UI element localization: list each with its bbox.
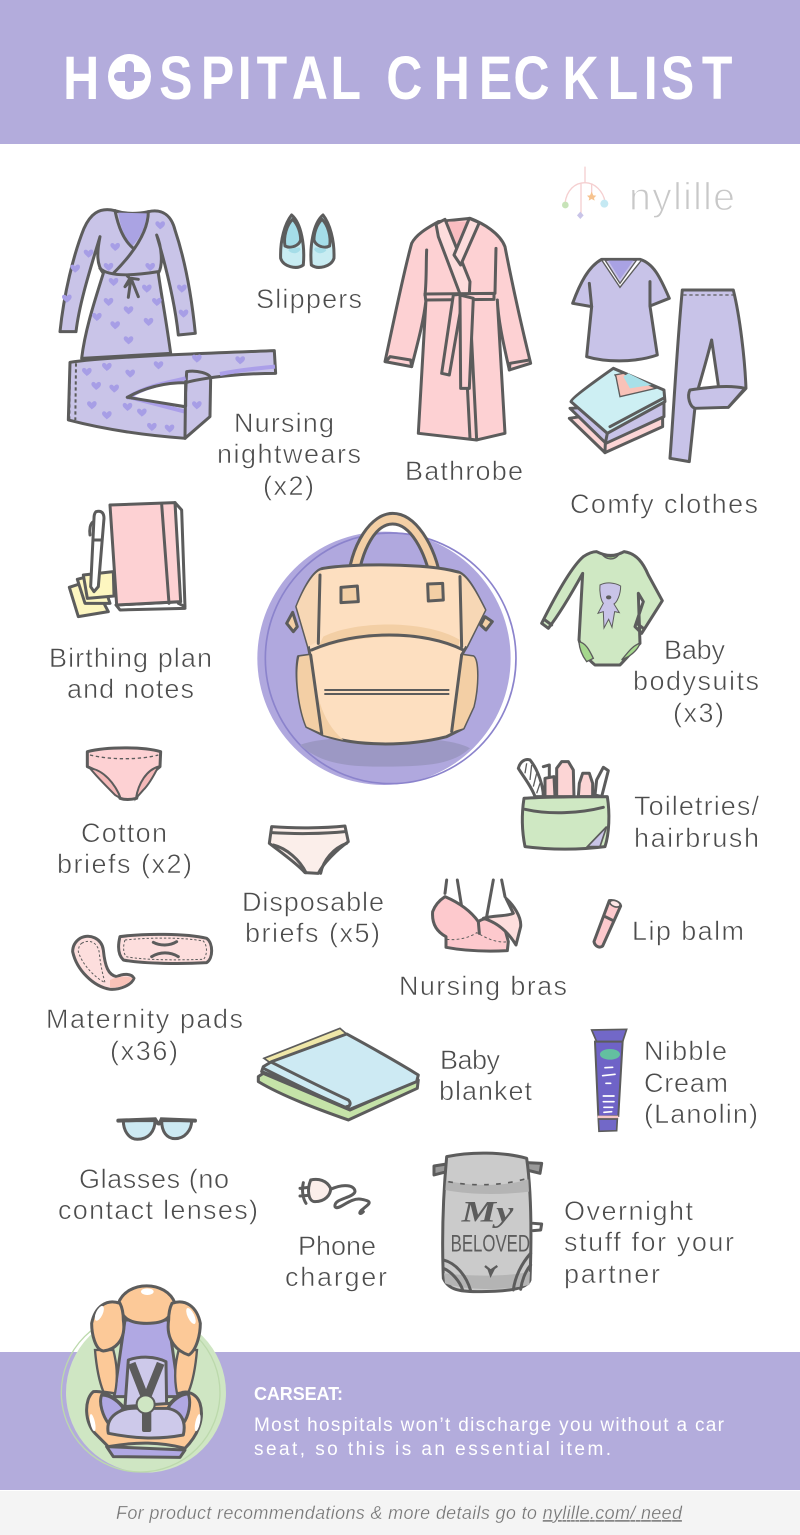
label: baby bodysuits (633, 635, 759, 728)
footer band (0, 1491, 800, 1535)
label: nursing nightwears: nightwears (217, 439, 361, 469)
carseat description: seat, so this is an essential item. (254, 1439, 611, 1460)
label: birthing plan (49, 643, 212, 704)
label: comfy clothes: Comfy clothes (570, 489, 758, 519)
label: glasses: Glasses (no (79, 1164, 229, 1194)
label: cotton briefs (57, 818, 192, 879)
label: cotton briefs: Cotton (81, 818, 167, 848)
carseat description (254, 1415, 725, 1460)
logo: nylille mobile: nylille (629, 175, 735, 219)
label: bathrobe: Bathrobe (405, 456, 523, 486)
title: HOSPITAL CHECKLIST (63, 44, 732, 112)
label: nipple cream: Cream (644, 1068, 728, 1098)
label: baby bodysuits: Baby (664, 635, 726, 665)
label: toiletries: hairbrush (634, 823, 759, 853)
label: overnight stuff: partner (564, 1259, 660, 1289)
label: lip balm: Lip balm (632, 916, 744, 946)
label: overnight stuff: Overnight (564, 1196, 693, 1226)
label: slippers: Slippers (256, 284, 362, 314)
label: maternity pads (46, 1004, 243, 1066)
label: baby bodysuits: (x3) (673, 698, 724, 728)
label: nursing nightwears: Nursing (234, 408, 334, 438)
label: overnight stuff: stuff for your (564, 1227, 734, 1257)
icon: overnight bag: BELOVED (451, 1231, 530, 1258)
icon: lip balm (594, 899, 621, 947)
icon: overnight bag: My (460, 1197, 515, 1229)
icon: baby blanket (258, 1028, 418, 1120)
label: nursing nightwears (217, 408, 361, 501)
label: nipple cream: (Lanolin) (644, 1099, 758, 1129)
label: baby blanket: Baby (440, 1045, 500, 1075)
icon: phone charger plug (300, 1179, 369, 1213)
label: baby blanket: blanket (439, 1076, 532, 1106)
label: overnight stuff (564, 1196, 734, 1289)
icon: carseat (61, 1286, 226, 1473)
label: phone charger: charger (285, 1262, 387, 1292)
label: disposable briefs: Disposable (242, 887, 384, 917)
icon: comfy clothes (569, 259, 746, 462)
logo: nylille mobile (562, 167, 735, 219)
icon: nipple cream tube (592, 1029, 627, 1131)
label: nursing nightwears: (x2) (263, 471, 314, 501)
label: cotton briefs: briefs (x2) (57, 849, 192, 879)
icon: disposable briefs (269, 826, 348, 873)
icon: bathrobe (385, 218, 531, 440)
label: maternity pads: (x36) (110, 1036, 178, 1066)
footer text: For product recommendations & more details go to nylille.com/ need (116, 1503, 683, 1523)
label: glasses: contact lenses) (58, 1195, 258, 1225)
icon: nursing bra (433, 880, 521, 951)
icon: cotton briefs (87, 748, 161, 800)
icon: maternity pads (73, 934, 212, 989)
label: nipple cream (644, 1036, 758, 1129)
icon: nursing nightwear (60, 210, 276, 438)
label: phone charger: Phone (298, 1231, 376, 1261)
icon: baby bodysuit (542, 552, 662, 665)
label: phone charger (285, 1231, 387, 1292)
label: disposable briefs: briefs (x5) (245, 918, 380, 948)
label: baby blanket (439, 1045, 532, 1106)
label: birthing plan: and notes (67, 674, 194, 704)
label: disposable briefs (242, 887, 384, 948)
label: toiletries: Toiletries/ (634, 791, 759, 821)
icon: overnight bag (434, 1153, 542, 1292)
icon: diaper bag (257, 513, 516, 785)
label: birthing plan: Birthing plan (49, 643, 212, 673)
label: glasses (58, 1164, 258, 1225)
label: baby bodysuits: bodysuits (633, 666, 759, 696)
icon: birthing plan notebook (69, 503, 185, 617)
carseat description: Most hospitals won’t discharge you without a car (254, 1415, 725, 1436)
label: maternity pads: Maternity pads (46, 1004, 243, 1034)
label: nursing bras: Nursing bras (399, 971, 567, 1001)
icon: slippers (281, 215, 334, 267)
carseat heading: CARSEAT: (254, 1384, 343, 1404)
label: nipple cream: Nibble (644, 1036, 727, 1066)
header band (0, 0, 800, 144)
panel: carseat band (0, 1352, 800, 1490)
label: toiletries (634, 791, 759, 853)
icon: glasses (118, 1119, 195, 1139)
icon: toiletries pouch (518, 760, 609, 849)
